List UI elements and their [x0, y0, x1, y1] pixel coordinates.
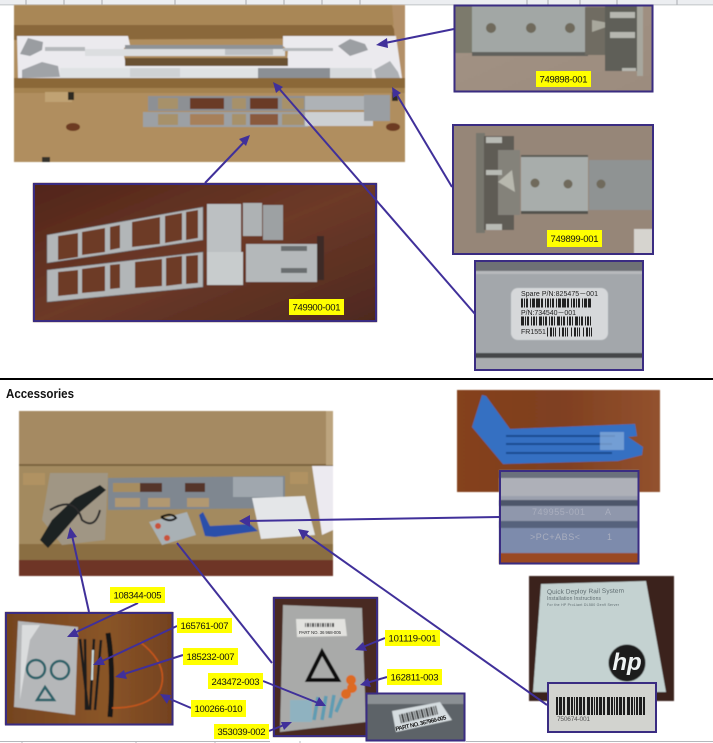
arrow: to blue bracket [239, 515, 499, 527]
photo: installation instructions booklet [529, 576, 674, 701]
label: 353039-002 with arrow [214, 722, 292, 739]
hp logo: hp [612, 649, 642, 676]
booklet title: For the HP ProLiant DL580 Gen9 Server [547, 603, 620, 607]
arrow: to rail 749898 [376, 29, 454, 48]
panel: booklet barcode 750674-001: 750674-001 [557, 716, 590, 723]
label: 749898-001 [536, 71, 591, 87]
label: 749900-001 [289, 299, 344, 315]
barcode label text: Spare P/N:825475－001 [521, 291, 598, 298]
booklet title: Installation Instructions [547, 596, 602, 602]
photo: accessories in box [19, 411, 333, 576]
label: 185232-007 with arrow: 185232-007 [186, 652, 234, 663]
booklet title: Quick Deploy Rail System [547, 588, 624, 596]
label: 749899-001: 749899-001 [550, 234, 598, 245]
panel: rail spare part label [475, 261, 643, 370]
molded part number text: 1 [607, 532, 612, 542]
booklet title [547, 588, 624, 607]
panel: part number inset: PART NO. 367966-005 [395, 715, 448, 733]
label: 162811-003 with arrow [360, 669, 442, 687]
label: 100266-010 with arrow: 100266-010 [194, 704, 242, 715]
arrow: to rail 749899 [392, 87, 452, 187]
label: 101119-001 with arrow [355, 630, 440, 651]
barcode label text: FR1551 [521, 329, 546, 336]
heading: Accessories: Accessories [6, 386, 74, 401]
arrow: to cable arms [205, 135, 250, 183]
panel: rail end 749898-001 [454, 5, 653, 92]
text on bag label: PART NO. 36 968-005 [299, 630, 341, 635]
label: 162811-003 with arrow: 162811-003 [390, 672, 438, 684]
photo: rail kit in open box [14, 5, 405, 162]
molded part number text: A [605, 507, 611, 517]
panel: part number inset [366, 694, 465, 741]
barcode label text [521, 291, 598, 336]
section divider [0, 378, 713, 380]
molded part number text [530, 507, 612, 542]
label: 108344-005 with arrow [67, 587, 165, 637]
panel: rail end 749899-001 [453, 125, 653, 254]
label: 185232-007 with arrow [115, 648, 238, 679]
panel: cable management arms 749900-001 [33, 183, 377, 322]
molded part number text: 749955-001 [532, 507, 585, 517]
panel: bag, cable ties and cables [5, 612, 173, 725]
line: hardware bag to box [177, 543, 272, 663]
arrow: to instructions [298, 529, 547, 705]
panel: blue bracket part marking [499, 470, 639, 564]
label: 165761-007 with arrow: 165761-007 [180, 621, 228, 632]
arrow: to rail label [273, 82, 475, 314]
label: 353039-002 with arrow: 353039-002 [218, 727, 266, 738]
label: 243472-003 with arrow [208, 673, 326, 706]
label: 749898-001: 749898-001 [540, 74, 588, 86]
label: 165761-007 with arrow [93, 618, 232, 665]
label: 108344-005 with arrow: 108344-005 [114, 590, 162, 602]
panel: booklet barcode 750674-001 [548, 683, 656, 732]
label: 749900-001: 749900-001 [292, 302, 340, 314]
barcode label text: P/N:734540－001 [521, 310, 576, 317]
photo: blue bracket [457, 390, 660, 492]
panel: hardware bag [273, 597, 378, 737]
spreadsheet bottom grid lines [0, 741, 713, 743]
spreadsheet column header strip [0, 0, 713, 5]
molded part number text: >PC+ABS< [530, 532, 580, 542]
label: 749899-001 [547, 230, 602, 247]
label: 100266-010 with arrow [160, 694, 246, 717]
label: 243472-003 with arrow: 243472-003 [212, 677, 260, 688]
label: 101119-001 with arrow: 101119-001 [388, 634, 436, 644]
arrow: to cable bag [67, 527, 89, 612]
